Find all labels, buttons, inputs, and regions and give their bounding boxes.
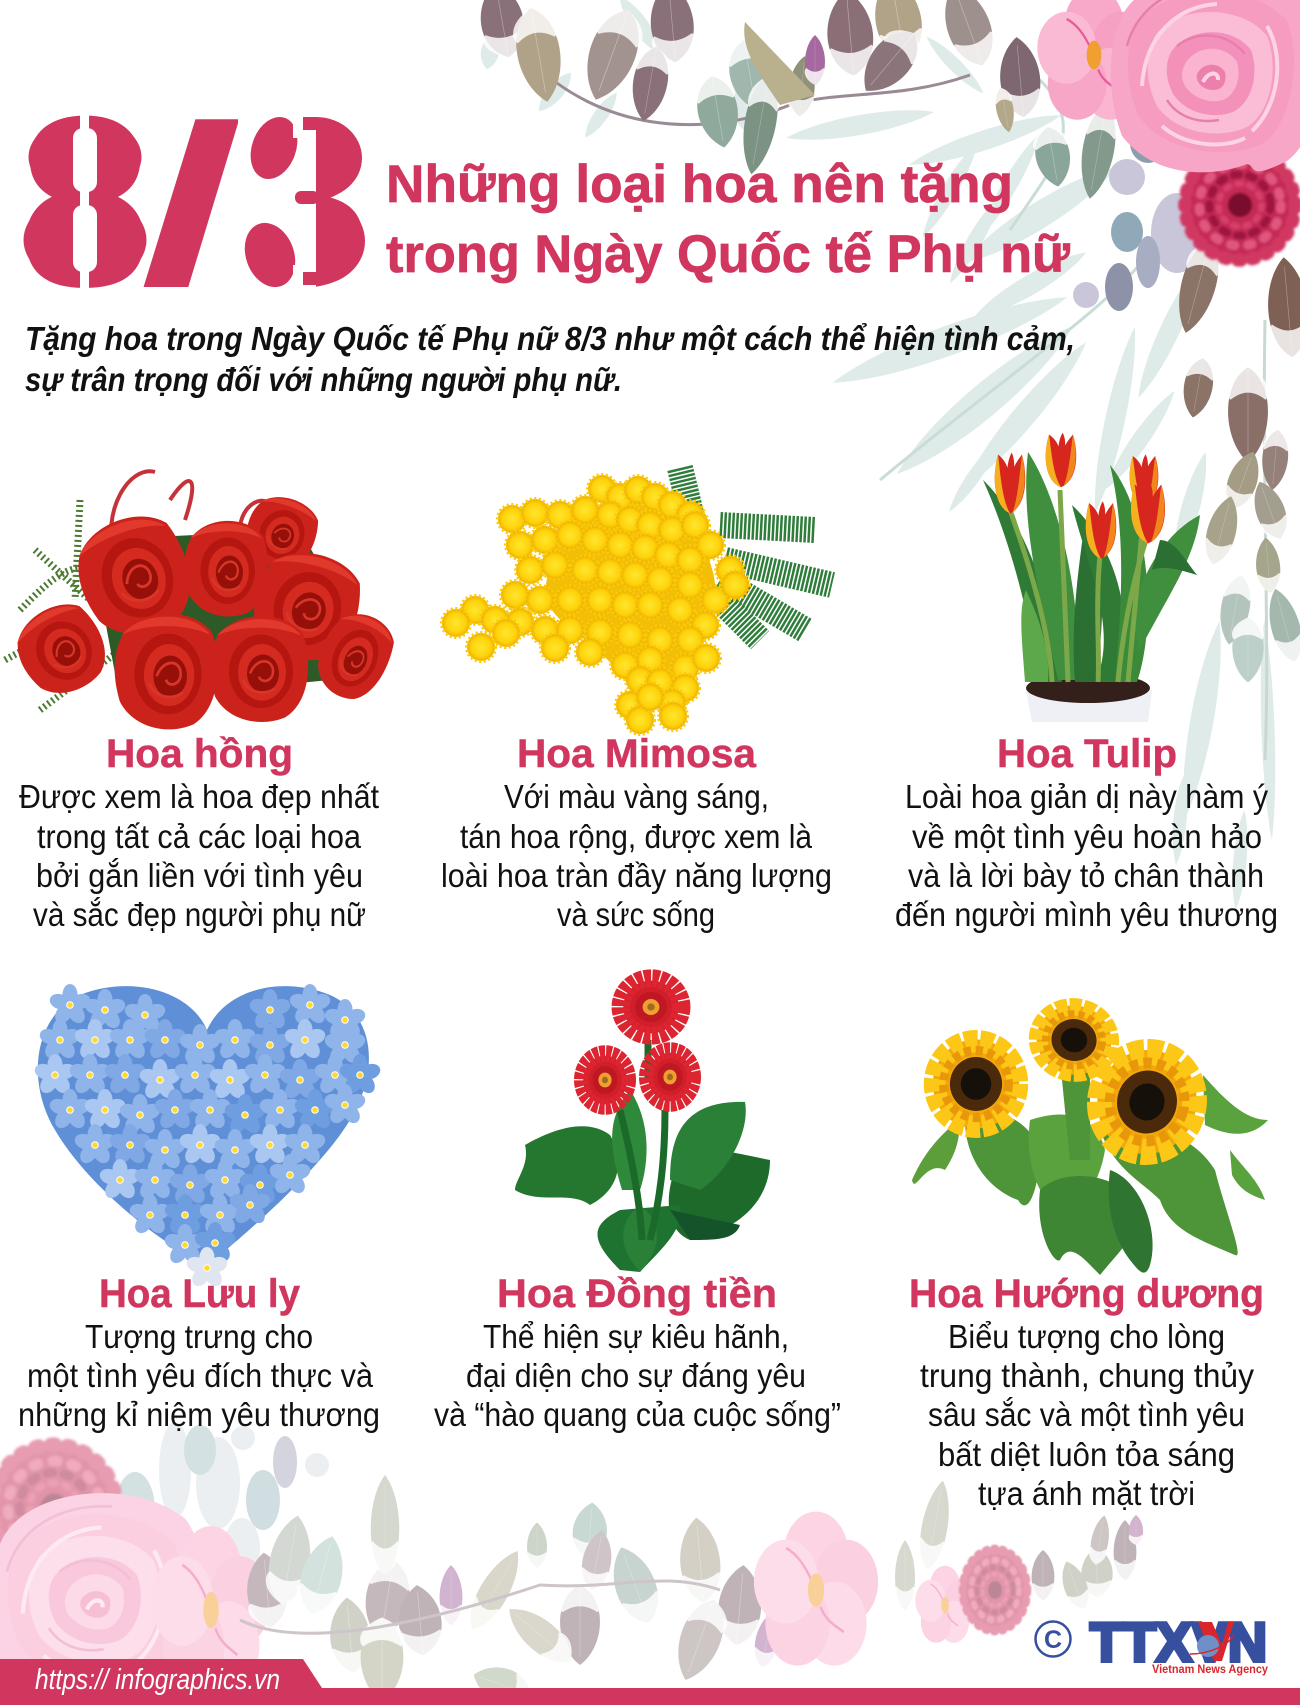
image: forget-me-not heart xyxy=(33,984,382,1289)
description: đại diện cho sự đáng yêu xyxy=(466,1357,806,1394)
copyright icon: C xyxy=(1044,1626,1062,1654)
description: và là lời bày tỏ chân thành xyxy=(908,857,1264,894)
title: Những loại hoa nên tặng xyxy=(386,155,1013,214)
description: Được xem là hoa đẹp nhất xyxy=(19,778,379,815)
panel: hoa mimosa xyxy=(441,468,832,933)
description: và sức sống xyxy=(557,896,715,933)
description: và “hào quang của cuộc sống” xyxy=(434,1396,841,1433)
description: một tình yêu đích thực và xyxy=(27,1357,374,1394)
name: Hoa Tulip xyxy=(997,732,1177,776)
top right floral decoration xyxy=(474,0,1300,910)
name: Hoa Hướng dương xyxy=(909,1272,1264,1316)
bottom floral decoration xyxy=(0,1422,1143,1705)
intro text: sự trân trọng đối với những người phụ nữ. xyxy=(25,361,622,398)
logo: TTXVN: Vietnam News Agency xyxy=(1152,1662,1268,1676)
panel: hoa lưu ly xyxy=(18,984,382,1433)
description: bất diệt luôn tỏa sáng xyxy=(938,1436,1235,1473)
intro text xyxy=(25,320,1075,398)
description xyxy=(18,1318,380,1433)
panel: hoa đồng tiền xyxy=(434,978,841,1433)
description: những kỉ niệm yêu thương xyxy=(18,1396,380,1433)
image: gerbera plant xyxy=(515,978,770,1272)
description: và sắc đẹp người phụ nữ xyxy=(33,896,366,933)
description: tán hoa rộng, được xem là xyxy=(460,818,813,855)
name: Hoa Đồng tiền xyxy=(497,1272,777,1316)
big heading 8/3: 3 xyxy=(243,62,369,337)
description xyxy=(434,1318,841,1433)
image: tulip pot xyxy=(983,433,1200,722)
description: bởi gắn liền với tình yêu xyxy=(36,857,363,894)
description: loài hoa tràn đầy năng lượng xyxy=(441,857,832,894)
panel: hoa hồng xyxy=(4,471,403,933)
description: Biểu tượng cho lòng xyxy=(948,1318,1225,1355)
description: Thể hiện sự kiêu hãnh, xyxy=(483,1318,789,1355)
big heading 8/3: / xyxy=(141,79,243,330)
copyright icon xyxy=(1036,1622,1070,1656)
description: sâu sắc và một tình yêu xyxy=(928,1396,1245,1433)
description: đến người mình yêu thương xyxy=(895,896,1278,933)
title: trong Ngày Quốc tế Phụ nữ xyxy=(386,225,1071,284)
panel: hoa tulip xyxy=(895,433,1278,933)
description xyxy=(19,778,379,933)
name: Hoa hồng xyxy=(106,732,293,776)
description: Loài hoa giản dị này hàm ý xyxy=(905,778,1268,815)
image: sunflowers xyxy=(912,999,1268,1275)
name: Hoa Lưu ly xyxy=(99,1272,301,1316)
description: Tượng trưng cho xyxy=(85,1318,313,1355)
name: Hoa Mimosa xyxy=(517,732,757,776)
description xyxy=(441,778,832,933)
image: rose bouquet xyxy=(4,471,403,729)
intro text: Tặng hoa trong Ngày Quốc tế Phụ nữ 8/3 như một cách thể hiện tình cảm, xyxy=(25,320,1075,357)
description xyxy=(895,778,1278,933)
panel: hoa hướng dương xyxy=(909,999,1268,1512)
description: trong tất cả các loại hoa xyxy=(37,818,362,855)
website url: https:// infographics.vn xyxy=(35,1664,280,1696)
description: về một tình yêu hoàn hảo xyxy=(912,818,1262,855)
logo: TTXVN: TTXVN xyxy=(1090,1611,1267,1673)
big heading 8/3 xyxy=(20,62,369,337)
title xyxy=(386,155,1071,284)
description: tựa ánh mặt trời xyxy=(978,1475,1195,1512)
big heading 8/3: 8 xyxy=(20,62,150,337)
image: mimosa xyxy=(442,468,832,734)
description xyxy=(920,1318,1254,1512)
footer bar xyxy=(0,1659,1300,1705)
description: trung thành, chung thủy xyxy=(920,1357,1254,1394)
description: Với màu vàng sáng, xyxy=(504,778,769,815)
